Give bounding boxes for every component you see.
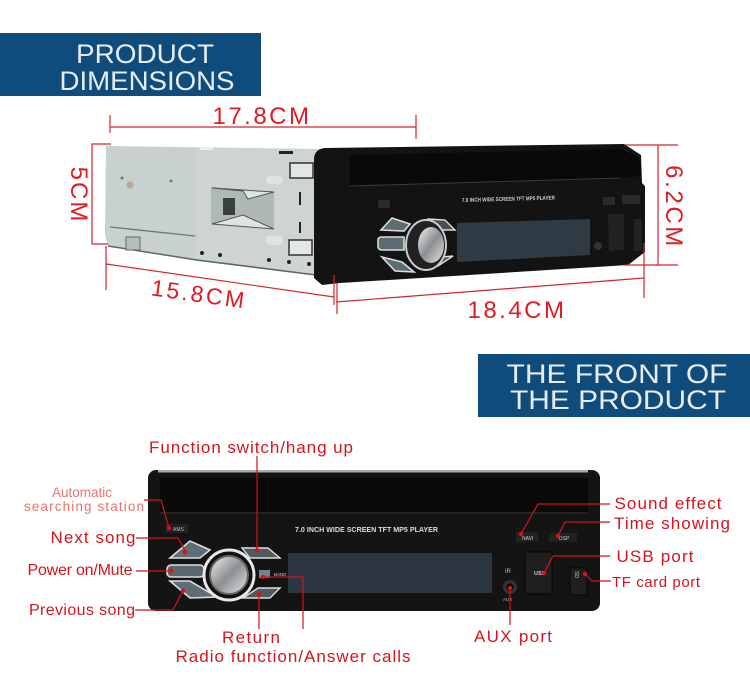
label: automatic searching station: searching station: [24, 499, 144, 514]
side ports: [608, 214, 624, 251]
label: previous song: Previous song: [29, 602, 135, 619]
label: function switch: Function switch/hang up: [149, 438, 353, 457]
label: next song: Next song: [50, 528, 136, 547]
small buttons and ports: USB: [534, 571, 546, 577]
dimension: height right 6.2CM: 6.2CM: [660, 165, 687, 249]
label: radio function: Radio function/Answer calls: [176, 647, 410, 666]
small buttons and ports: IR: [505, 569, 512, 575]
label: return: Return: [222, 628, 280, 647]
control buttons: BAND: [274, 572, 287, 577]
label: time showing: Time showing: [614, 514, 730, 533]
dimension: depth 15.8CM: [106, 246, 334, 314]
label: tf card port: TF card port: [612, 574, 701, 591]
screen: [457, 219, 590, 262]
banner: the front of the product: THE PRODUCT: [510, 385, 726, 415]
dimension: depth 15.8CM: 15.8CM: [150, 275, 249, 314]
dimension: width top 17.8CM: 17.8CM: [212, 103, 312, 130]
banner: product dimensions: [0, 33, 261, 96]
product photo: side view of car stereo: [105, 144, 645, 285]
button ring and knob: [378, 218, 455, 272]
dimension: height left 5CM: [65, 144, 111, 244]
small buttons and ports: NAVI: [522, 536, 533, 542]
label: usb port: USB port: [616, 547, 694, 566]
label: automatic searching station: Automatic: [52, 485, 112, 500]
small buttons and ports: AUX: [503, 597, 512, 602]
label: power on/mute: Power on/Mute: [28, 562, 133, 579]
banner: product dimensions: PRODUCT: [76, 39, 214, 69]
small buttons and ports: [166, 524, 587, 602]
small buttons and ports: DSP: [559, 536, 570, 542]
display screen: [288, 553, 492, 593]
label: aux port: AUX port: [474, 627, 552, 646]
volume knob: [204, 550, 254, 600]
dimension: front width 18.4CM: [336, 243, 644, 324]
control buttons: [167, 541, 287, 598]
banner: product dimensions: DIMENSIONS: [60, 66, 234, 96]
dimension: width top 17.8CM: [110, 103, 416, 139]
metal chassis: [105, 146, 320, 275]
dimension: height left 5CM: 5CM: [65, 167, 92, 223]
label: sound effect: Sound effect: [614, 494, 722, 513]
printed model label: 7.0 INCH WIDE SCREEN TFT MP5 PLAYER: [462, 196, 555, 204]
black front panel: [314, 144, 645, 285]
small buttons and ports: SD: [573, 571, 579, 578]
callout lines and dots: [135, 456, 611, 629]
product photo: front panel: [148, 470, 600, 611]
dimension: front width 18.4CM: 18.4CM: [467, 297, 567, 324]
dimension: height right 6.2CM: [625, 145, 687, 265]
printed model label: 7.0 INCH WIDE SCREEN TFT MP5 PLAYER: [295, 525, 438, 534]
small buttons and ports: AMS: [173, 527, 184, 533]
banner: the front of the product: THE FRONT OF: [506, 359, 728, 389]
label: automatic searching station: [24, 485, 144, 514]
banner: the front of the product: [478, 354, 750, 417]
